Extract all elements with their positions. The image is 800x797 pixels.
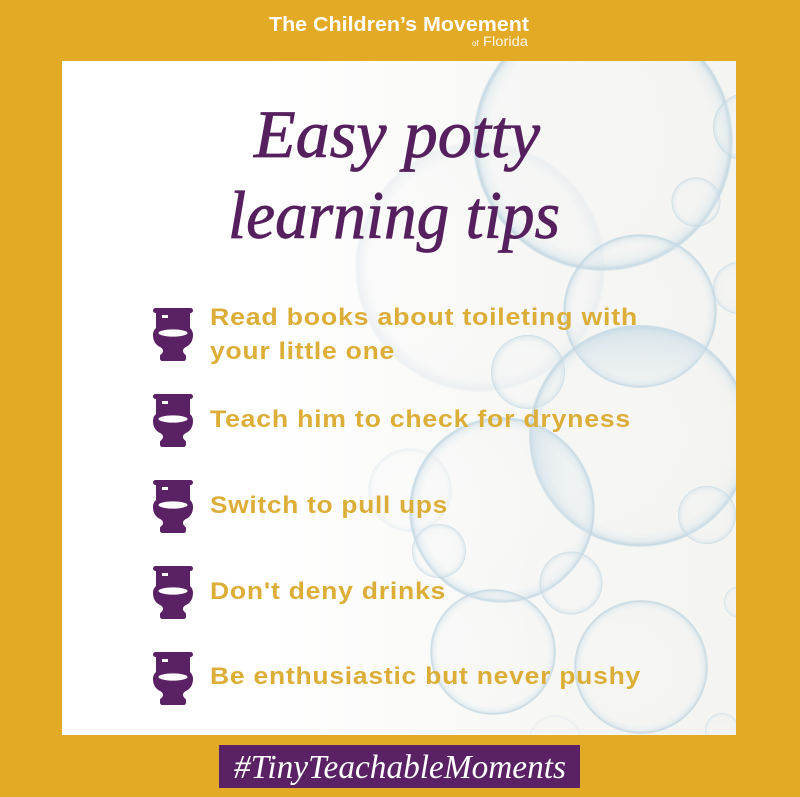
- tip 1 text: [210, 304, 638, 365]
- header logo: The Children's Movement of Florida: The Children’s Movement: [269, 14, 529, 36]
- tip 4 text: Don't deny drinks: [210, 578, 446, 605]
- tip 1 text: your little one: [210, 338, 395, 365]
- title: Easy potty learning tips: [228, 96, 560, 253]
- tip 3: [153, 480, 448, 533]
- tip 1: [153, 304, 638, 365]
- icon: toilet 4: [153, 566, 193, 619]
- header logo: The Children's Movement of Florida: [269, 14, 529, 49]
- icon: toilet 1: [153, 308, 193, 361]
- icon: toilet 5: [153, 652, 193, 705]
- tip 1 text: Read books about toileting with: [210, 304, 638, 331]
- header logo: The Children's Movement of Florida: Florida: [483, 34, 529, 49]
- panel: white card with bubbles: [62, 61, 736, 735]
- header logo: The Children's Movement of Florida: of: [472, 39, 479, 48]
- icon: toilet 3: [153, 480, 193, 533]
- tip 5: [153, 652, 641, 705]
- title: Easy potty learning tips: learning tips: [228, 177, 560, 253]
- icon: toilet 2: [153, 394, 193, 447]
- tip 5 text: Be enthusiastic but never pushy: [210, 663, 641, 690]
- tip 4: [153, 566, 446, 619]
- tip 2: [153, 394, 631, 447]
- tip 3 text: Switch to pull ups: [210, 492, 448, 519]
- tip 2 text: Teach him to check for dryness: [210, 406, 631, 433]
- bubbles background: [356, 61, 736, 735]
- hashtag banner: #TinyTeachableMoments: [234, 749, 566, 786]
- title: Easy potty learning tips: Easy potty: [253, 96, 541, 172]
